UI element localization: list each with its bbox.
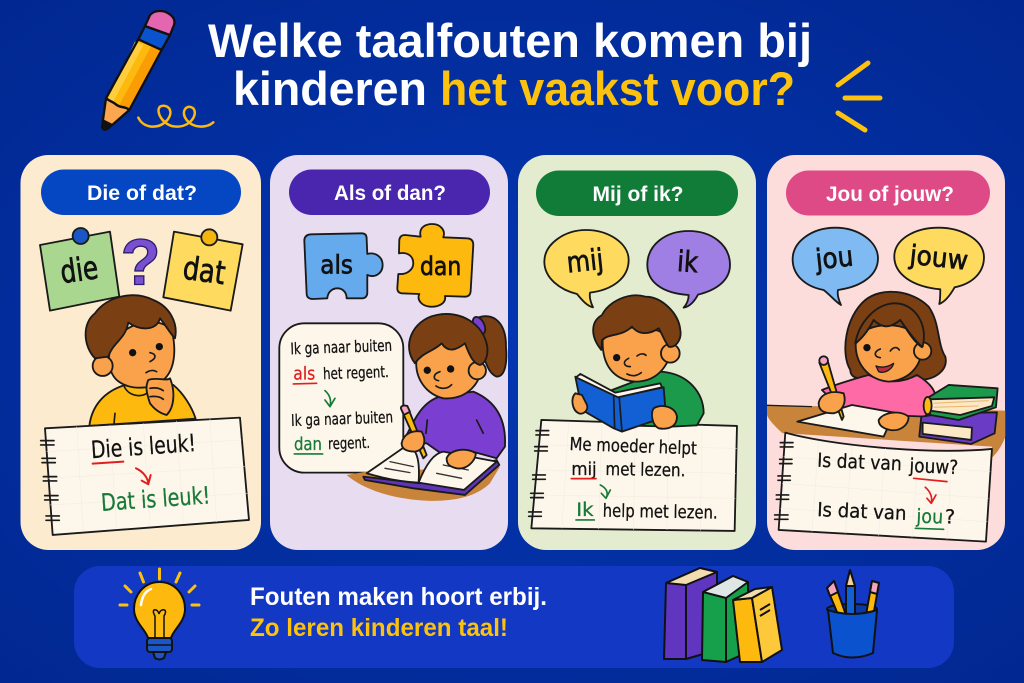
heading pill: mij of ik xyxy=(536,170,738,216)
illustration: puzzle pieces xyxy=(304,224,473,307)
notebook: die is leuk: Dat is leuk! xyxy=(100,481,211,517)
banner text: Fouten maken hoort erbij. xyxy=(250,583,547,611)
speech bubble: als dan example xyxy=(279,323,403,473)
heading pill: jou of jouw: Jou of jouw? xyxy=(826,183,954,206)
heading pill: als of dan: Als of dan? xyxy=(334,182,446,205)
heading pill: die of dat xyxy=(41,170,241,215)
illustration: reading boy xyxy=(572,295,704,432)
speech bubble: als dan example: regent. xyxy=(328,433,370,453)
notebook: jou en jouw: Is dat van xyxy=(817,498,907,525)
panel: die of dat xyxy=(20,155,261,550)
notebook: mij en ik: Ik xyxy=(576,500,594,521)
speech bubble: als dan example: als xyxy=(293,363,315,384)
illustration: puzzle pieces: als xyxy=(320,250,353,280)
title: kinderen xyxy=(233,62,427,115)
notebook: jou en jouw: ? xyxy=(944,505,956,529)
banner text: Zo leren kinderen taal! xyxy=(250,614,508,642)
illustration: notes and thinking boy xyxy=(40,225,243,426)
illustration: speech bubbles jou and jouw: jou xyxy=(813,239,855,276)
heading pill: mij of ik: Mij of ik? xyxy=(592,183,684,206)
notebook: mij en ik: Me moeder helpt xyxy=(569,434,697,459)
heading pill: als of dan xyxy=(289,170,490,215)
heading pill: jou of jouw xyxy=(786,170,990,216)
speech bubble: als dan example: het regent. xyxy=(323,362,389,383)
illustration: speech bubbles mij and ik xyxy=(544,230,730,308)
title: het vaakst voor? xyxy=(440,62,795,115)
illustration: writing girl xyxy=(347,314,506,501)
speech bubble: als dan example: dan xyxy=(294,434,322,455)
banner text xyxy=(250,583,547,642)
illustration: speech bubbles jou and jouw: jouw xyxy=(907,240,969,277)
illustration: notes and thinking boy: die xyxy=(58,248,100,291)
notebook: jou en jouw: Is dat van xyxy=(817,449,902,475)
notebook: jou en jouw: jouw? xyxy=(908,454,959,479)
notebook: mij en ik: mij xyxy=(571,459,597,480)
panel: mij of ik xyxy=(518,155,756,550)
illustration: notes and thinking boy: dat xyxy=(181,249,228,292)
illustration: notes and thinking boy: ? xyxy=(121,225,161,298)
illustration: speech bubbles mij and ik: ik xyxy=(676,244,700,279)
notebook: jou en jouw: jou xyxy=(915,505,944,529)
illustration: speech bubbles mij and ik: mij xyxy=(565,242,605,280)
panel: als of dan xyxy=(270,155,508,550)
banner: closing message xyxy=(74,566,954,668)
speech bubble: als dan example: Ik ga naar buiten xyxy=(290,336,392,358)
notebook: mij en ik: help met lezen. xyxy=(603,501,718,524)
notebook: jou en jouw xyxy=(775,433,992,542)
title: Welke taalfouten komen bij xyxy=(208,14,812,67)
illustration: writing girl at desk xyxy=(767,292,1005,458)
notebook: mij en ik: met lezen. xyxy=(605,459,686,481)
panel: jou of jouw xyxy=(767,155,1005,550)
notebook: die is leuk: Die is leuk! xyxy=(90,429,197,464)
title xyxy=(208,14,812,115)
icon: books xyxy=(664,568,782,662)
illustration: speech bubbles jou and jouw xyxy=(793,228,984,305)
icon: pencil cup xyxy=(827,570,879,658)
notebook: die is leuk xyxy=(41,418,249,535)
speech bubble: als dan example: Ik ga naar buiten xyxy=(291,407,393,430)
notebook: mij en ik xyxy=(529,420,737,531)
heading pill: die of dat: Die of dat? xyxy=(87,182,197,205)
illustration: puzzle pieces: dan xyxy=(420,251,461,281)
icon: pencil with squiggle xyxy=(102,11,213,130)
icon: yellow spark lines xyxy=(838,63,880,130)
icon: light bulb xyxy=(120,569,199,660)
